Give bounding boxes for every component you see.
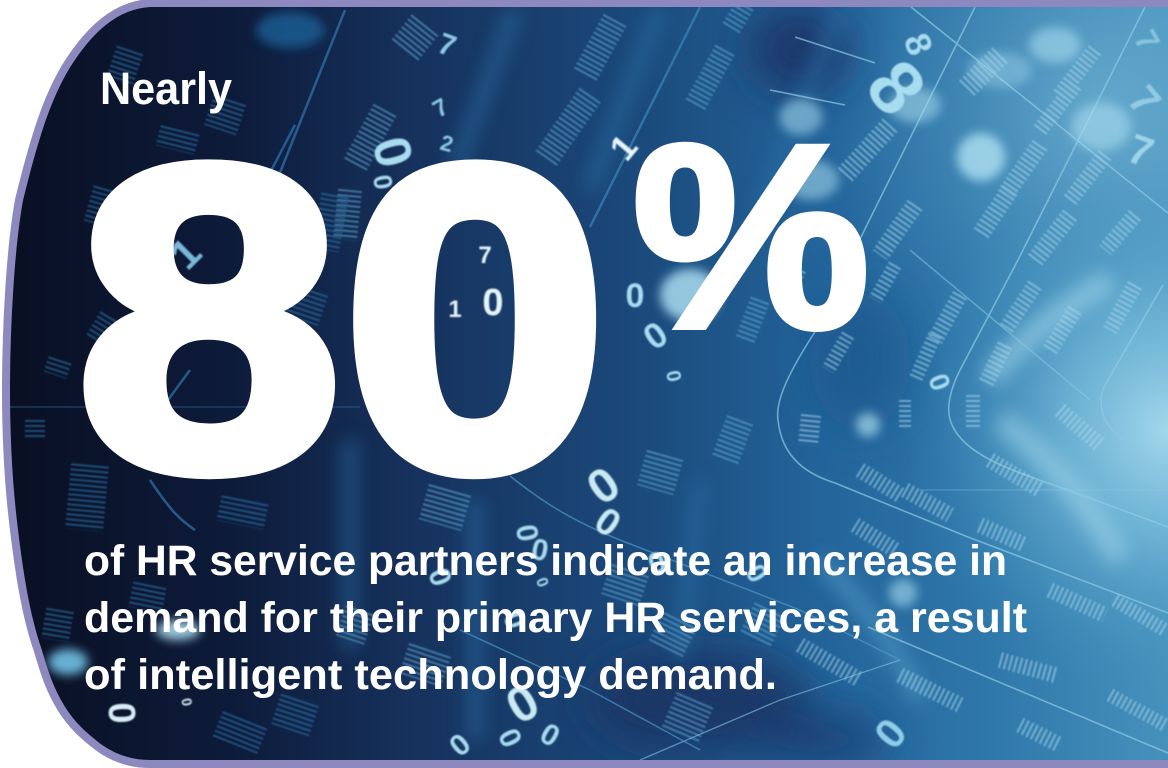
- heading: Nearly: Nearly: [100, 63, 232, 114]
- floating digits: 0: [534, 717, 565, 754]
- floating digits: 0: [496, 673, 549, 735]
- data stream streaks: left: [35, 50, 335, 745]
- data stream streaks: right: [785, 50, 1165, 745]
- percent sign: %: [632, 90, 870, 383]
- description text: demand for their primary HR services, a result: [84, 594, 1027, 642]
- floating digits: 0: [509, 522, 544, 544]
- floating digits: 0: [865, 709, 916, 757]
- floating digits: 0: [635, 313, 675, 358]
- data stream streaks: centre: [345, 5, 770, 735]
- floating digits: 7: [428, 93, 453, 123]
- floating digits: 7: [478, 242, 492, 269]
- floating digits: 7: [1127, 24, 1167, 57]
- floating digits: 8: [896, 28, 941, 61]
- floating digits: 0: [367, 172, 399, 192]
- floating digits: 7: [433, 27, 460, 64]
- floating digits: 0: [497, 608, 532, 633]
- description text: [84, 537, 1027, 699]
- floating digits: 0: [578, 457, 630, 516]
- floating digits: 0: [661, 369, 685, 384]
- floating digits: 0: [421, 564, 458, 591]
- floating digits: 7: [1122, 124, 1160, 177]
- floating digits: 0: [532, 575, 551, 590]
- floating digits: 0: [491, 724, 528, 753]
- floating digits: 0: [178, 697, 196, 707]
- floating digits: 0: [626, 277, 644, 315]
- floating digits: 0: [644, 545, 671, 582]
- description text: of intelligent technology demand.: [84, 651, 777, 699]
- floating digits: 0: [360, 131, 424, 174]
- floating digits: 8: [850, 44, 942, 131]
- floating digits: 2: [438, 130, 456, 157]
- soft vertical light bands: [350, 8, 1120, 740]
- floating digits: 0: [100, 702, 142, 724]
- big number: 80: 80: [76, 77, 608, 560]
- floating digits: 0: [443, 727, 477, 763]
- floating digits: 1: [601, 126, 646, 168]
- floating digits: 0: [739, 559, 774, 588]
- floating digits: 0: [922, 370, 957, 395]
- floating digits: 0: [482, 282, 504, 324]
- description text: of HR service partners indicate an increase in: [84, 537, 1007, 585]
- floating digits: 0: [587, 500, 628, 546]
- floating digits: 1: [448, 296, 462, 323]
- floating digits: 0: [529, 533, 551, 568]
- dark patches: [590, 5, 910, 768]
- floating digits: 1: [160, 228, 210, 278]
